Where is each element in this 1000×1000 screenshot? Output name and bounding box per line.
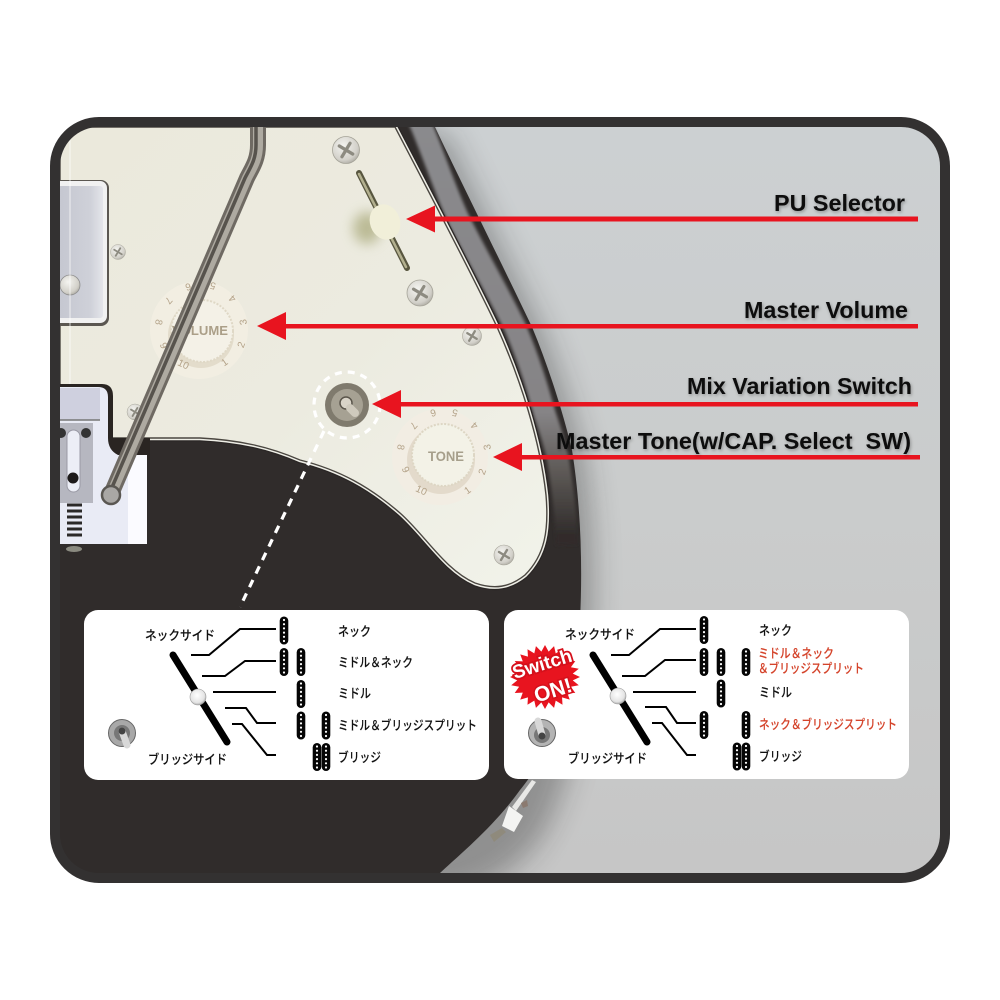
position labels: ネック＆ブリッジスプリット — [759, 717, 897, 732]
arrow: master tone — [493, 443, 920, 471]
label: PU Selector: PU Selector — [774, 190, 905, 216]
position labels: ネック — [338, 624, 371, 639]
volume knob: 3 — [238, 318, 250, 326]
tone knob: 4 — [469, 419, 481, 431]
tone knob: 7 — [407, 419, 419, 431]
selector lever diagram — [593, 629, 696, 755]
position labels — [758, 623, 897, 764]
pickup position icons — [700, 616, 750, 770]
strings — [70, 140, 71, 384]
screws — [110, 136, 514, 565]
position labels: ミドル＆ネック — [758, 646, 834, 661]
pickguard — [60, 127, 547, 587]
volume knob: 5 — [208, 279, 217, 291]
tone knob: TONE — [428, 448, 464, 464]
panel: switch on wiring chart — [504, 610, 909, 779]
arrow: master volume — [257, 312, 918, 340]
volume knob — [155, 282, 247, 369]
position labels: ミドル＆ネック — [338, 655, 413, 670]
body shadow — [435, 127, 607, 873]
arrow: mix variation switch — [372, 390, 918, 418]
whammy bar — [102, 120, 258, 504]
position labels: ブリッジ — [759, 749, 802, 764]
guitar body — [60, 127, 581, 873]
bridge side label: ブリッジサイド — [568, 751, 647, 766]
neck pickup — [60, 180, 109, 326]
label: Mix Variation Switch: Mix Variation Switch — [687, 373, 912, 399]
volume knob: 7 — [162, 294, 174, 306]
tone knob: 2 — [477, 467, 489, 476]
badge: Switch ON: Switch — [510, 646, 575, 684]
label: Master Tone: Master Tone(w/CAP. Select SW) — [556, 428, 911, 454]
position labels: ネック — [759, 623, 792, 638]
tone knob: 9 — [399, 465, 411, 475]
bridge assembly — [56, 384, 150, 552]
output jack — [490, 780, 536, 842]
volume knob: 8 — [152, 318, 164, 326]
background panel — [55, 122, 945, 878]
position labels: ＆ブリッジスプリット — [758, 661, 864, 676]
position labels — [338, 624, 477, 765]
position labels: ミドル — [759, 685, 792, 700]
card background — [84, 610, 489, 780]
tone knob: 3 — [482, 443, 494, 451]
toggle icon up — [528, 720, 556, 746]
dashed highlight circle and leader — [240, 372, 380, 607]
selector lever diagram — [173, 629, 276, 755]
tone knob: 10 — [414, 484, 429, 499]
position labels: ミドル＆ブリッジスプリット — [338, 718, 477, 733]
volume knob: 4 — [227, 292, 239, 304]
badge: Switch ON: ON! — [531, 674, 575, 707]
selector switch — [353, 173, 407, 268]
position labels: ミドル — [338, 686, 371, 701]
neck side label: ネックサイド — [145, 628, 215, 643]
volume knob: VOLUME — [172, 323, 228, 338]
label: Master Volume: Master Volume — [744, 297, 908, 323]
body edge highlight band — [419, 120, 567, 545]
volume knob: 1 — [220, 357, 231, 369]
tone knob — [397, 409, 491, 495]
volume knob: 9 — [157, 341, 169, 351]
tone knob: 6 — [428, 406, 437, 418]
pickup position icons — [280, 616, 330, 771]
position labels: ブリッジ — [338, 750, 381, 765]
tone knob: 1 — [463, 485, 474, 497]
arrow: PU selector — [406, 206, 918, 232]
volume knob: 10 — [176, 358, 191, 373]
volume knob: 6 — [183, 280, 192, 292]
badge: Switch ON — [510, 645, 580, 709]
panel: switch off wiring chart — [84, 610, 489, 780]
guitar photo — [40, 120, 593, 896]
toggle icon down — [108, 720, 136, 746]
mix variation toggle switch — [325, 383, 369, 427]
tone knob: 5 — [450, 406, 459, 418]
neck side label: ネックサイド — [565, 627, 635, 642]
tone knob: 8 — [394, 443, 406, 451]
outer frame — [55, 122, 945, 878]
card background — [504, 610, 909, 779]
volume knob: 2 — [236, 340, 248, 349]
bridge side label: ブリッジサイド — [148, 752, 227, 767]
